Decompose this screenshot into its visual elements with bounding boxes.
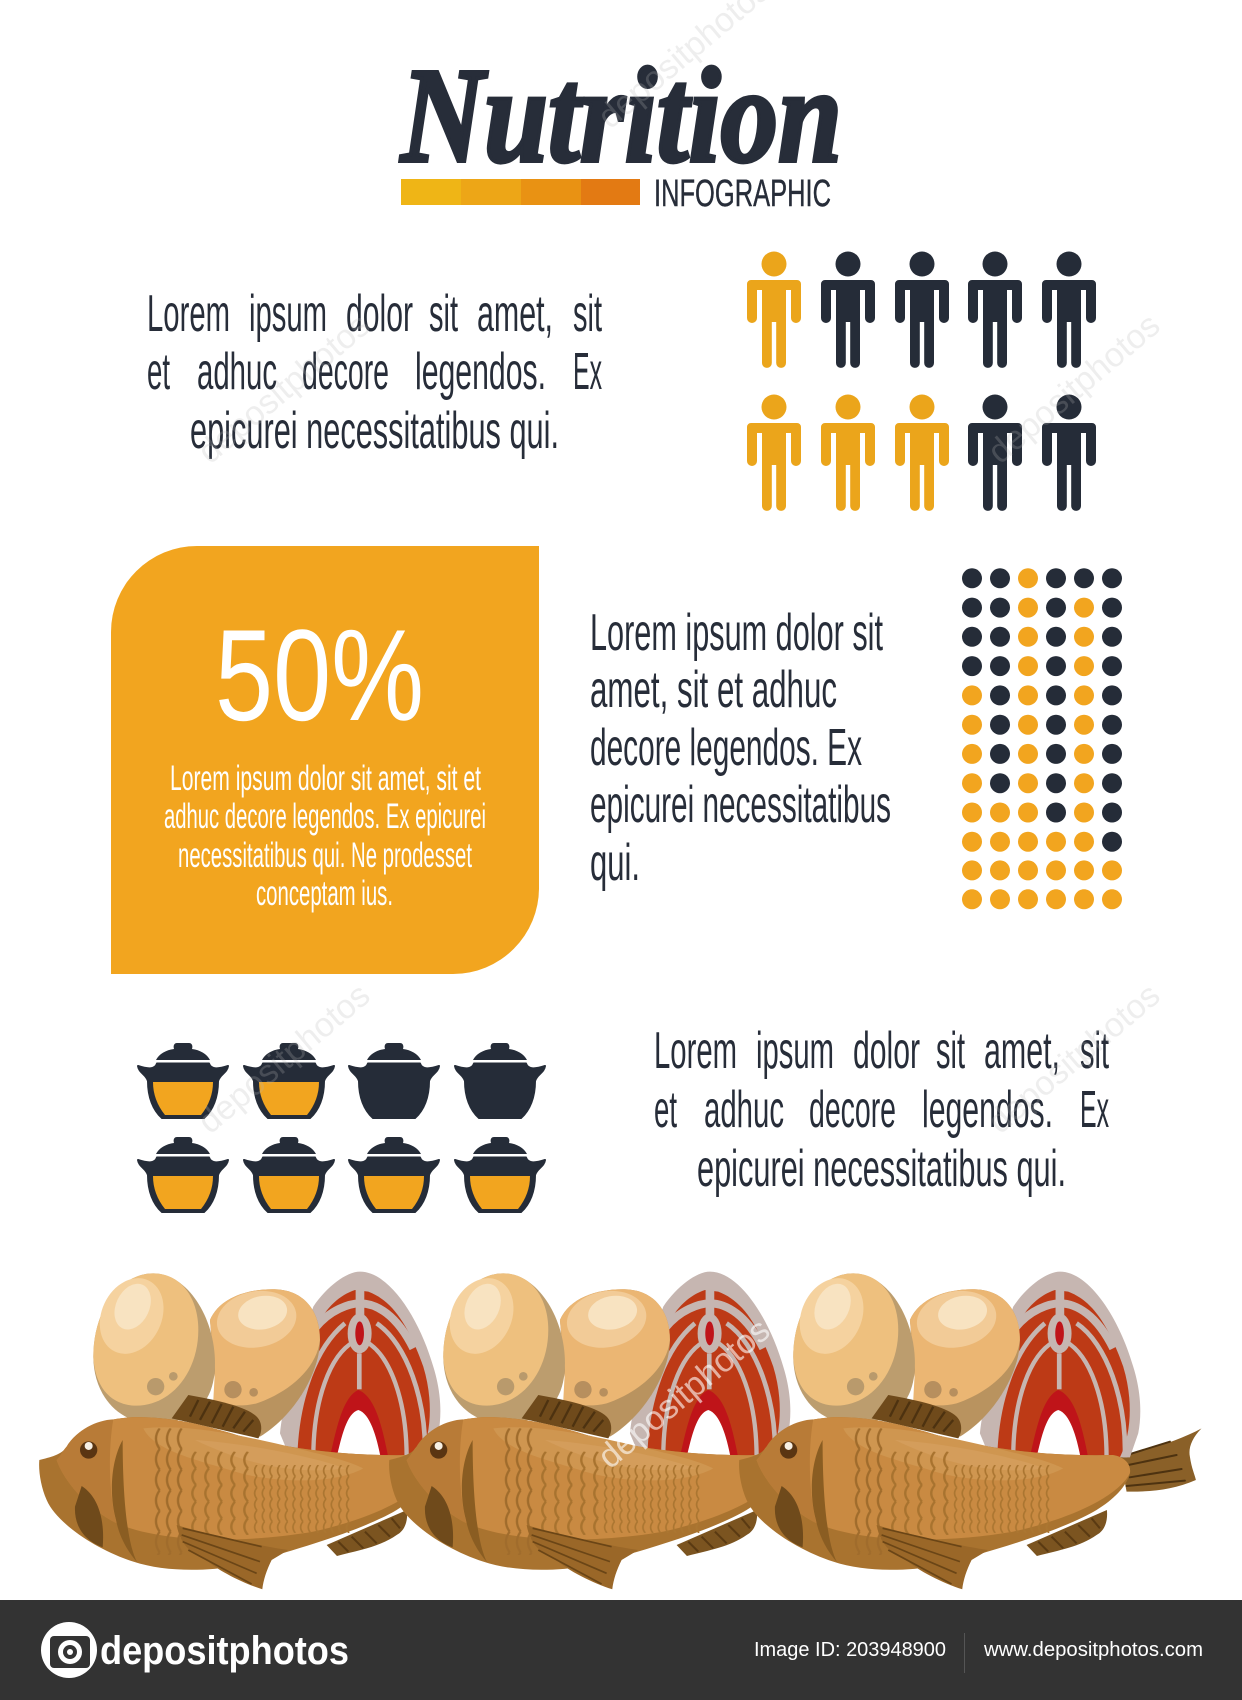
watermark: depositphotos bbox=[981, 976, 1167, 1141]
text block 1: adhuc bbox=[197, 343, 277, 401]
divider bbox=[964, 1633, 965, 1673]
people pictogram bbox=[747, 252, 1096, 511]
food set 1 bbox=[39, 1268, 440, 1589]
text block 3: sit bbox=[936, 1022, 965, 1080]
food set 3 bbox=[739, 1268, 1140, 1589]
text block 1: amet, bbox=[477, 285, 553, 343]
person row 2 bbox=[747, 394, 1096, 511]
text block 1: sit bbox=[429, 285, 458, 343]
text block 3: adhuc bbox=[704, 1081, 784, 1139]
text: Ex bbox=[573, 343, 602, 401]
text block 1: sit bbox=[573, 285, 602, 343]
text block 1: epicurei necessitatibus qui. bbox=[190, 402, 559, 460]
text block 3: sit bbox=[1080, 1022, 1109, 1080]
fish tail bbox=[1120, 1428, 1202, 1492]
panel: 50% callout bbox=[111, 546, 539, 974]
text block 2: decore legendos. Ex bbox=[590, 719, 862, 777]
panel text: Lorem ipsum dolor sit amet, sit et bbox=[170, 759, 481, 798]
colour bar bbox=[401, 179, 640, 205]
text: Ex bbox=[1080, 1081, 1109, 1139]
pots row 2 bbox=[138, 1137, 545, 1212]
logo wordmark: depositphotos bbox=[100, 1629, 349, 1673]
title word: Nutrition: Nutrition bbox=[399, 41, 842, 191]
text block 1: et bbox=[147, 343, 170, 401]
text block 2: epicurei necessitatibus bbox=[590, 776, 891, 834]
dot matrix bbox=[962, 568, 1122, 909]
pots pictogram bbox=[138, 1043, 545, 1212]
panel background bbox=[111, 546, 539, 974]
panel text: conceptam ius. bbox=[256, 874, 393, 913]
percentage: 50% bbox=[215, 602, 424, 748]
watermark: depositphotos bbox=[591, 1311, 777, 1476]
food set 2 bbox=[389, 1268, 790, 1589]
footer background bbox=[0, 1600, 1242, 1700]
text block 3: et bbox=[654, 1081, 677, 1139]
text block 3: amet, bbox=[984, 1022, 1060, 1080]
text block 3: dolor bbox=[853, 1022, 920, 1080]
website: www.depositphotos.com bbox=[983, 1639, 1203, 1661]
text block 1: ipsum bbox=[249, 285, 327, 343]
panel text bbox=[164, 759, 486, 913]
text block 2: Lorem ipsum dolor sit bbox=[590, 604, 883, 662]
subtitle: INFOGRAPHIC: INFOGRAPHIC bbox=[654, 173, 831, 215]
text block 2: amet, sit et adhuc bbox=[590, 661, 837, 719]
footer bar bbox=[0, 1600, 1242, 1700]
text block 3: ipsum bbox=[756, 1022, 834, 1080]
title bbox=[399, 41, 842, 215]
text block 1: dolor bbox=[346, 285, 413, 343]
text block 1: legendos. bbox=[415, 343, 546, 401]
text block 2: qui. bbox=[590, 834, 640, 892]
text block 2 bbox=[590, 604, 891, 892]
text block 1: decore bbox=[302, 343, 389, 401]
watermark: depositphotos bbox=[191, 976, 377, 1141]
pots row 1 bbox=[138, 1043, 545, 1118]
text block 3: legendos. bbox=[922, 1081, 1053, 1139]
text block 1: Lorem bbox=[147, 285, 230, 343]
text block 3: Lorem bbox=[654, 1022, 737, 1080]
panel text: necessitatibus qui. Ne prodesset bbox=[178, 836, 472, 875]
text block 3: decore bbox=[809, 1081, 896, 1139]
logo icon bbox=[41, 1622, 97, 1678]
watermark: depositphotos bbox=[191, 306, 377, 471]
person row 1 bbox=[747, 252, 1096, 368]
panel text: adhuc decore legendos. Ex epicurei bbox=[164, 797, 486, 836]
image id: Image ID: 203948900 bbox=[754, 1639, 946, 1661]
food illustration: eggs, salmon steaks and fish bbox=[39, 1268, 1202, 1589]
watermark bbox=[191, 0, 1167, 1476]
watermark: depositphotos bbox=[981, 306, 1167, 471]
